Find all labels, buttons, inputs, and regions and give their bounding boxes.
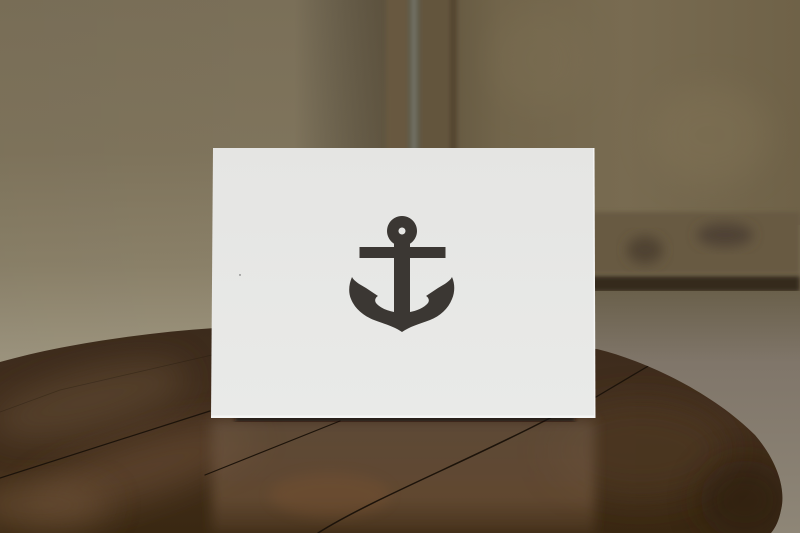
white card [211,148,596,418]
table: plank seams [0,355,650,533]
background: lower right wall [590,291,800,533]
background: right wall [450,0,800,225]
table: highlights and stains [0,345,790,533]
anchor ring [387,216,417,246]
card shadow [235,417,575,421]
wooden table [0,328,790,533]
background: left wall [0,0,392,380]
anchor shank and flukes [349,243,454,332]
small speck on card [239,274,241,276]
anchor crossbar [360,247,446,258]
background: wall rail [590,212,800,292]
icon: anchor [349,216,454,332]
background: wooden post [386,0,458,155]
